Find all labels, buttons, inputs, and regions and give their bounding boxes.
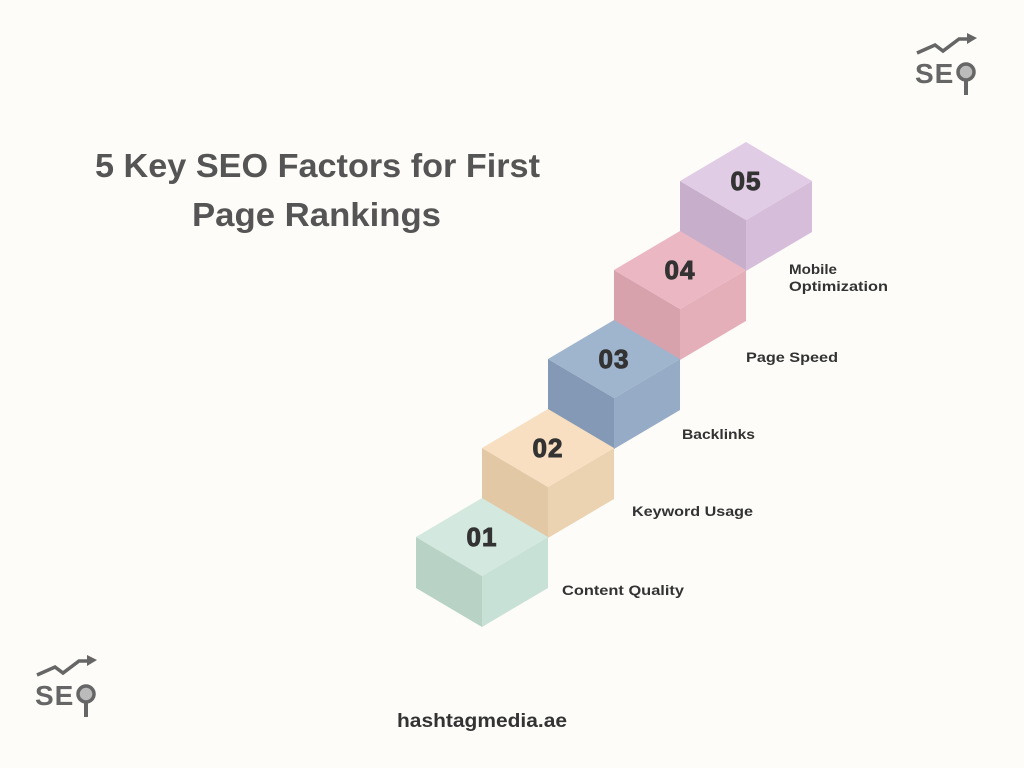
footer: hashtagmedia.ae (397, 711, 567, 732)
label: Backlinks: Backlinks (682, 426, 755, 442)
cube 01: 01 (467, 522, 497, 552)
icon: SEO top right: SE (915, 58, 954, 89)
label: Keyword Usage: Keyword Usage (632, 503, 753, 519)
cube 04 (614, 231, 746, 360)
label: Mobile Optimization: Mobile (789, 261, 837, 277)
title: 5 Key SEO Factors for First (95, 147, 540, 184)
icon: SEO bottom left: SE (35, 680, 74, 711)
cube 05: 05 (731, 166, 761, 196)
cube 02 (482, 409, 614, 538)
cube 03 (548, 320, 680, 449)
cube 02: 02 (533, 433, 563, 463)
title (95, 147, 540, 233)
icon: SEO top right (915, 33, 977, 95)
icon: SEO bottom left (35, 655, 97, 717)
cube 03: 03 (599, 344, 629, 374)
title: Page Rankings (192, 196, 441, 233)
label: Mobile Optimization (789, 261, 888, 294)
label: Content Quality: Content Quality (562, 582, 684, 598)
cube 04: 04 (665, 255, 695, 285)
label: Mobile Optimization: Optimization (789, 278, 888, 294)
cube 05 (680, 142, 812, 271)
label: Page Speed: Page Speed (746, 349, 838, 365)
cube 01 (416, 498, 548, 627)
